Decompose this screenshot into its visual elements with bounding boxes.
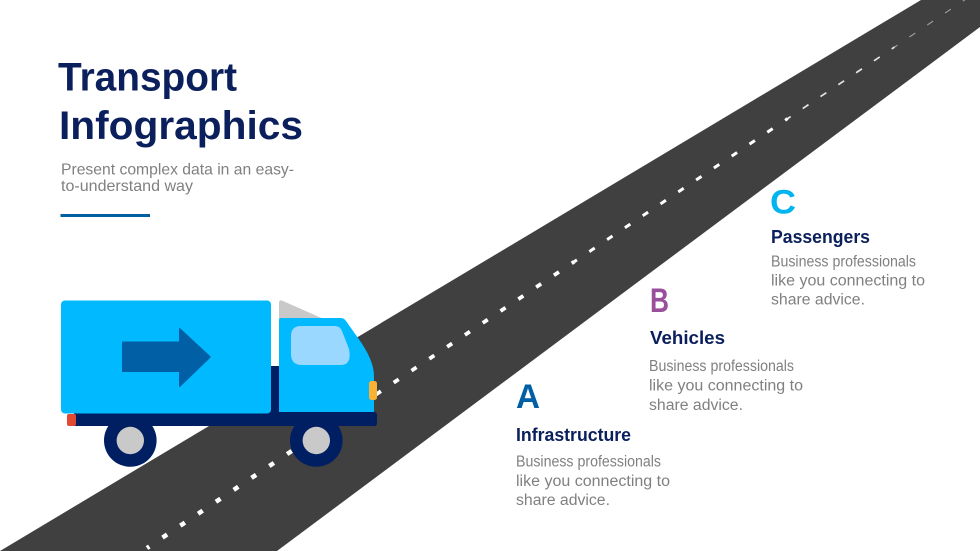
letter A: A [516, 378, 540, 416]
rear light [67, 414, 76, 426]
cab window [291, 326, 350, 365]
body C: share advice. [771, 292, 865, 308]
body B [649, 358, 803, 414]
title [58, 56, 303, 148]
body A: share advice. [516, 492, 610, 509]
body B: share advice. [649, 397, 743, 414]
front wheel [290, 414, 343, 467]
icon: delivery truck [61, 300, 377, 467]
rear wheel [104, 414, 157, 467]
body B: like you connecting to [649, 378, 803, 394]
truck wind deflector [279, 300, 326, 320]
heading B: Vehicles [650, 328, 725, 348]
body A [516, 454, 670, 509]
title: Infographics [59, 104, 303, 148]
body C: Business professionals [771, 254, 916, 270]
body C: like you connecting to [771, 272, 925, 290]
section C: Passengers [770, 184, 925, 308]
subtitle: to-understand way [61, 178, 193, 195]
heading A: Infrastructure [516, 425, 631, 445]
letter B: B [650, 282, 669, 320]
section A: Infrastructure [516, 378, 670, 509]
headlight [369, 381, 377, 400]
subtitle [61, 162, 294, 195]
accent rule [60, 214, 150, 217]
truck chassis [74, 366, 377, 426]
body A: Business professionals [516, 454, 661, 470]
letter C: C [770, 184, 796, 222]
title: Transport [58, 56, 237, 100]
arrow on cargo box [122, 328, 210, 387]
body A: like you connecting to [516, 473, 670, 490]
cargo box [61, 300, 271, 414]
body B: Business professionals [649, 358, 794, 375]
cab [279, 318, 374, 412]
subtitle: Present complex data in an easy- [61, 162, 294, 178]
section B: Vehicles [649, 282, 803, 414]
body C [771, 254, 925, 308]
heading C: Passengers [771, 227, 870, 247]
